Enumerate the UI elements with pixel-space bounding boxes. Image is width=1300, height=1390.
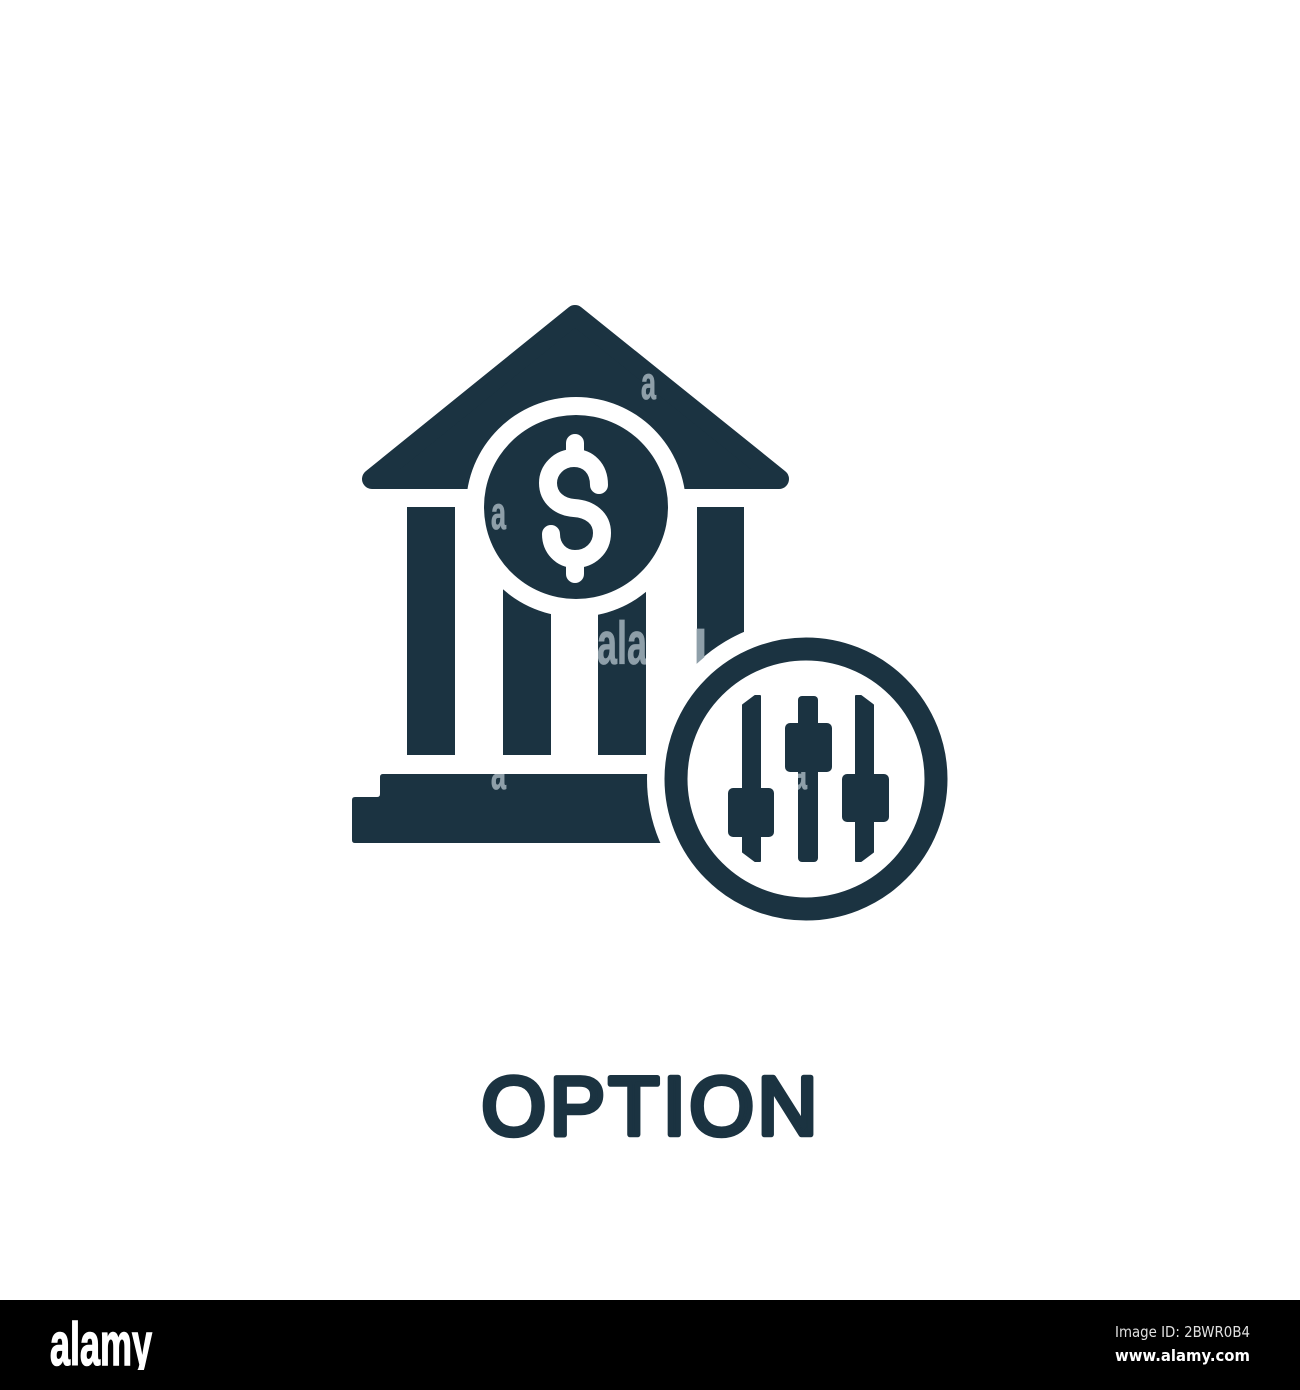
- watermark marks over icon: a: [641, 357, 656, 409]
- icon: stepped base: [352, 774, 700, 843]
- icon: slider badge ring: [676, 649, 936, 909]
- title: OPTION: [482, 1060, 818, 1152]
- icon: bank roof: [372, 315, 779, 479]
- icon: bank pillars: [407, 507, 744, 755]
- watermark marks over icon: a: [792, 747, 807, 799]
- icon: bank building with dollar coin and option sliders: [352, 315, 967, 939]
- website: www.alamy.com: [1115, 1346, 1250, 1365]
- watermark marks over icon: [491, 357, 807, 799]
- image id: Image ID: 2BWR0B4: [1115, 1323, 1250, 1341]
- icon: white ring around coin: [466, 397, 686, 617]
- watermark marks over icon: a: [491, 747, 506, 799]
- icon: dollar coin: [484, 415, 668, 599]
- footer bar: [0, 1300, 1300, 1390]
- icon: white halo around slider badge: [647, 619, 967, 939]
- watermark marks over icon: a: [491, 487, 506, 539]
- footer logo: alamy: [50, 1311, 152, 1378]
- icon: sliders: [728, 696, 889, 862]
- watermark marks over icon: ala: [597, 610, 647, 677]
